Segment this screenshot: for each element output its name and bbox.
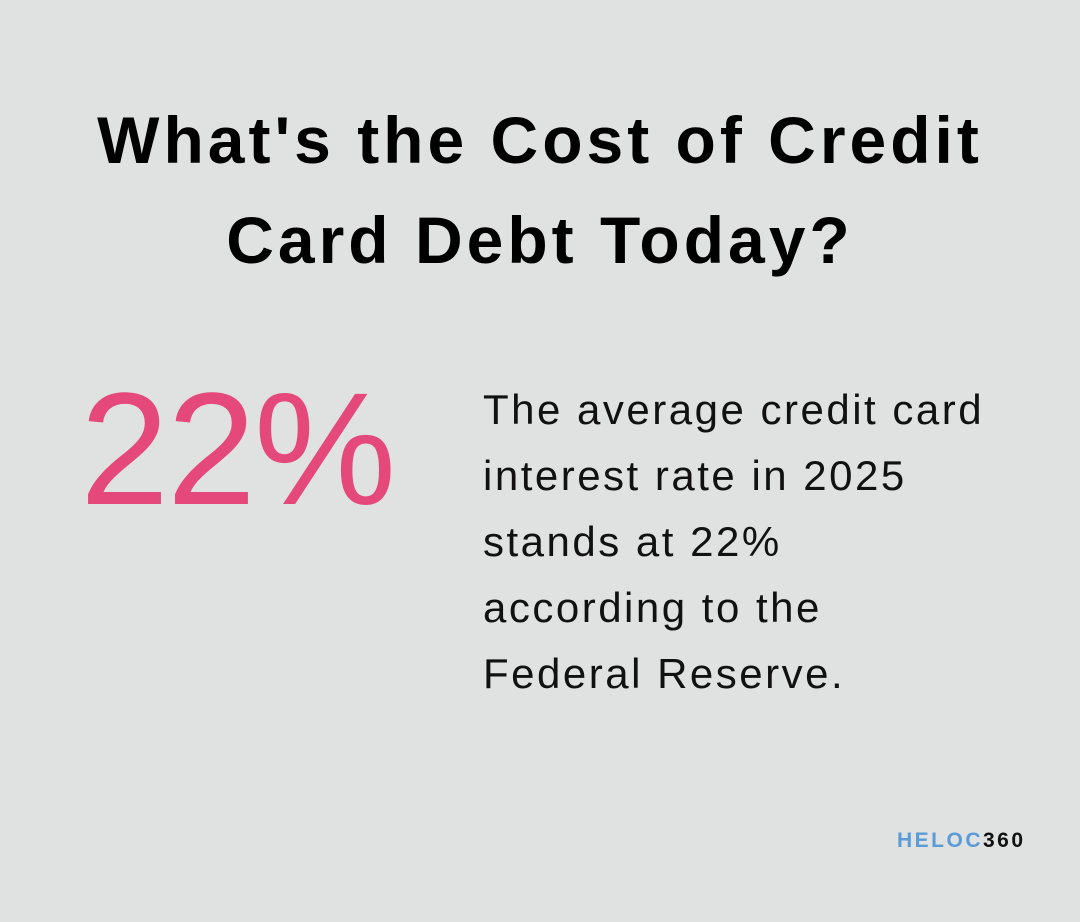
logo: HELOC360: HELOC360 xyxy=(897,829,1026,852)
description text: stands at 22% xyxy=(483,518,782,565)
description text: Federal Reserve. xyxy=(483,650,845,697)
title xyxy=(97,103,983,277)
description text xyxy=(483,386,984,697)
title: What's the Cost of Credit xyxy=(97,103,983,177)
title: Card Debt Today? xyxy=(226,203,854,277)
big stat: 22%: 22% xyxy=(80,359,394,538)
description text: The average credit card xyxy=(483,386,984,433)
description text: interest rate in 2025 xyxy=(483,452,907,499)
description text: according to the xyxy=(483,584,822,631)
